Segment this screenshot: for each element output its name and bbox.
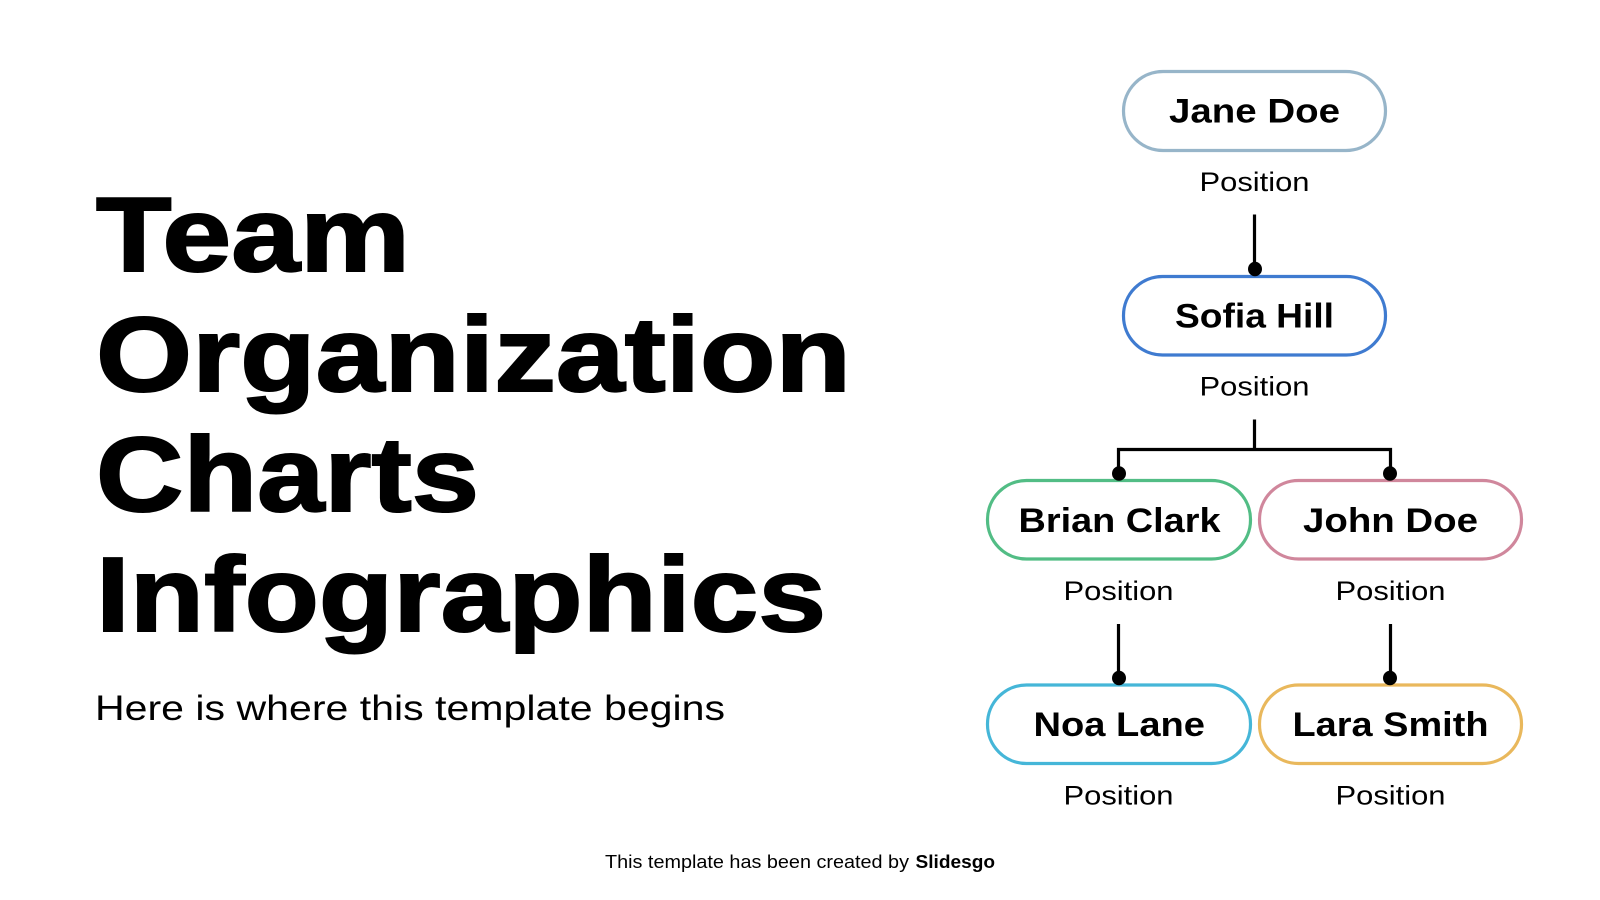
- node: John Doe: John Doe: [1303, 502, 1478, 540]
- connector: Sofia Hill to Brian Clark and John Doe: [1112, 420, 1397, 481]
- node: Sofia Hill: Sofia Hill: [1175, 298, 1334, 336]
- node: Lara Smith: Position: [1336, 780, 1446, 810]
- org chart: [988, 72, 1522, 810]
- title: Infographics: [96, 536, 826, 654]
- title: Organization: [96, 296, 851, 414]
- footer credit: This template has been created by: [605, 852, 909, 872]
- node: John Doe: Position: [1336, 576, 1446, 606]
- connector: John Doe to Lara Smith: [1383, 624, 1397, 685]
- node: Lara Smith: [1260, 685, 1522, 810]
- node: Sofia Hill: [1124, 276, 1386, 402]
- title: [96, 176, 851, 654]
- connector: Jane Doe to Sofia Hill: [1248, 214, 1262, 276]
- node: Jane Doe: [1124, 72, 1386, 197]
- node: Brian Clark: Position: [1064, 576, 1174, 606]
- subtitle: Here is where this template begins: [95, 689, 725, 728]
- node: Jane Doe: Position: [1200, 167, 1310, 197]
- node: Brian Clark: Brian Clark: [1018, 502, 1221, 540]
- node: Sofia Hill: Position: [1200, 372, 1310, 402]
- node: Noa Lane: [988, 685, 1250, 810]
- title: Team: [96, 176, 410, 294]
- connector: Brian Clark to Noa Lane: [1112, 624, 1126, 685]
- node: Brian Clark: [988, 480, 1250, 606]
- node: Noa Lane: Position: [1064, 780, 1174, 810]
- node: Jane Doe: Jane Doe: [1169, 92, 1340, 130]
- node: John Doe: [1260, 480, 1522, 606]
- node: Lara Smith: Lara Smith: [1292, 706, 1488, 744]
- node: Noa Lane: Noa Lane: [1034, 706, 1205, 744]
- footer credit: Slidesgo: [916, 852, 995, 872]
- title: Charts: [96, 416, 479, 534]
